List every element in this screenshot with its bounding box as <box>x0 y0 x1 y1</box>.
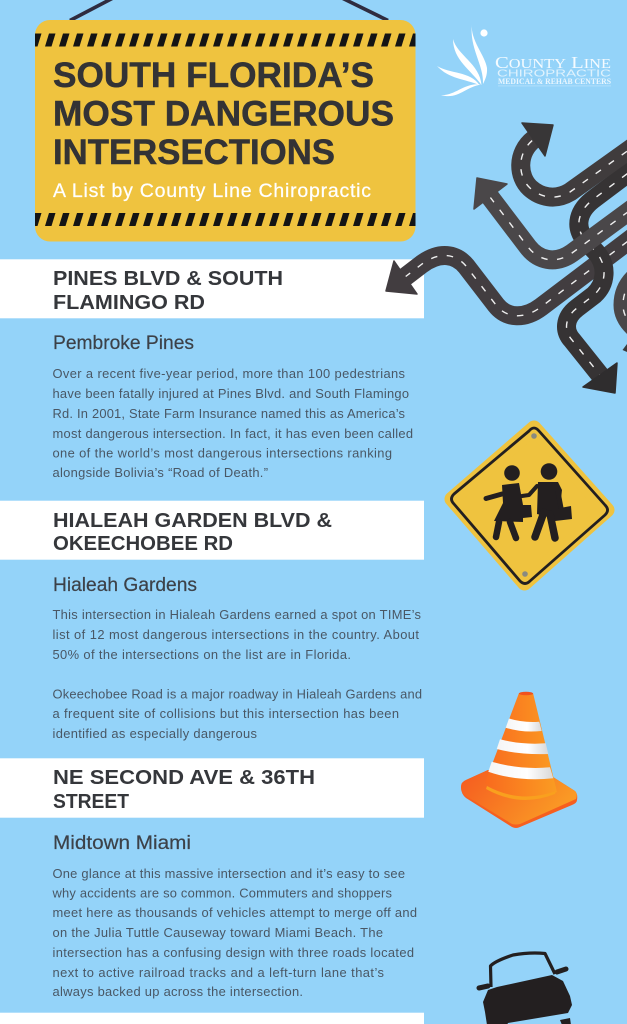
road: U-turn arrow <box>521 123 627 197</box>
logo: County Line Chiropractic: CHIROPRACTIC <box>497 68 612 80</box>
paragraph 2: This intersection in Hialeah Gardens earned a spot on TIME’s <box>52 607 421 622</box>
paragraph 3 <box>52 866 417 999</box>
section 2 text <box>52 509 422 741</box>
heading 2 <box>53 509 332 555</box>
heading 1: PINES BLVD & SOUTH <box>53 267 283 290</box>
section 3 text <box>52 766 417 999</box>
paragraph 1: Over a recent five-year period, more than 100 pedestrians <box>52 366 405 381</box>
heading 2: HIALEAH GARDEN BLVD & <box>53 509 332 532</box>
title <box>53 56 394 172</box>
paragraph 1 <box>52 366 413 480</box>
paragraph 3: intersection has a confusing design with three roads located <box>52 945 414 960</box>
paragraph 1: have been fatally injured at Pines Blvd. and South Flamingo <box>52 386 409 401</box>
road: upper-left arrow <box>474 178 627 260</box>
icon: car silhouette <box>479 953 572 1024</box>
sign hanging wires <box>70 0 388 20</box>
section band 4 (cut off) <box>0 1013 424 1024</box>
road: down arrow <box>567 164 627 393</box>
heading 1 <box>53 267 283 314</box>
title: INTERSECTIONS <box>53 133 335 172</box>
logo: County Line Chiropractic: MEDICAL & REHAB CENTERS <box>498 77 612 86</box>
paragraph 1: most dangerous intersection. In fact, it has even been called <box>52 426 413 441</box>
title: MOST DANGEROUS <box>53 94 394 134</box>
paragraph 2: identified as especially dangerous <box>52 726 257 741</box>
logo: County Line Chiropractic <box>437 24 612 96</box>
subtitle: A List by County Line Chiropractic <box>53 180 371 202</box>
paragraph 2: list of 12 most dangerous intersections in the country. About <box>52 627 419 642</box>
hazard stripes top <box>35 34 416 46</box>
heading 1: FLAMINGO RD <box>53 291 205 314</box>
title sign panel <box>35 20 416 242</box>
title: SOUTH FLORIDA’S <box>53 56 374 95</box>
section 1 text <box>52 267 413 480</box>
illustration: winding road arrows <box>386 123 627 393</box>
logo: County Line Chiropractic: COUNTY LINE <box>495 53 611 72</box>
paragraph 2: a frequent site of collisions but this intersection has been <box>52 706 399 721</box>
paragraph 1: one of the world’s most dangerous intersections ranking <box>52 446 392 460</box>
paragraph 3: One glance at this massive intersection and it’s easy to see <box>52 866 405 881</box>
paragraph 3: on the Julia Tuttle Causeway toward Miami Beach. The <box>52 925 383 940</box>
paragraph 1: Rd. In 2001, State Farm Insurance named this as America’s <box>52 406 405 421</box>
heading 3 <box>53 766 315 813</box>
paragraph 1: alongside Bolivia’s “Road of Death.” <box>52 465 268 480</box>
paragraph 3: always backed up across the intersection. <box>52 984 303 999</box>
paragraph 3: why accidents are so common. Commuters and shoppers <box>52 886 392 900</box>
road: right edge curve <box>622 270 627 352</box>
paragraph 2: Okeechobee Road is a major roadway in Hialeah Gardens and <box>52 686 422 702</box>
road: wavy left arrow <box>386 232 627 316</box>
location 2: Hialeah Gardens <box>53 575 197 596</box>
section band 2 <box>0 501 424 560</box>
icon: traffic cone <box>461 692 577 828</box>
heading 3: STREET <box>53 790 129 813</box>
paragraph 3: next to active railroad tracks and a left-turn lane that’s <box>52 965 384 980</box>
paragraph 2: 50% of the intersections on the list are in Florida. <box>52 647 351 662</box>
hazard stripes bottom <box>35 213 416 226</box>
heading 2: OKEECHOBEE RD <box>53 532 233 555</box>
section band 1 <box>0 259 424 318</box>
location 1: Pembroke Pines <box>53 333 194 354</box>
paragraph 2 <box>52 607 422 741</box>
section band 3 <box>0 758 424 818</box>
heading 3: NE SECOND AVE & 36TH <box>53 766 315 789</box>
paragraph 3: meet here as thousands of vehicles attempt to merge off and <box>52 905 417 920</box>
location 3: Midtown Miami <box>53 833 191 854</box>
icon: school crossing sign <box>452 428 608 584</box>
